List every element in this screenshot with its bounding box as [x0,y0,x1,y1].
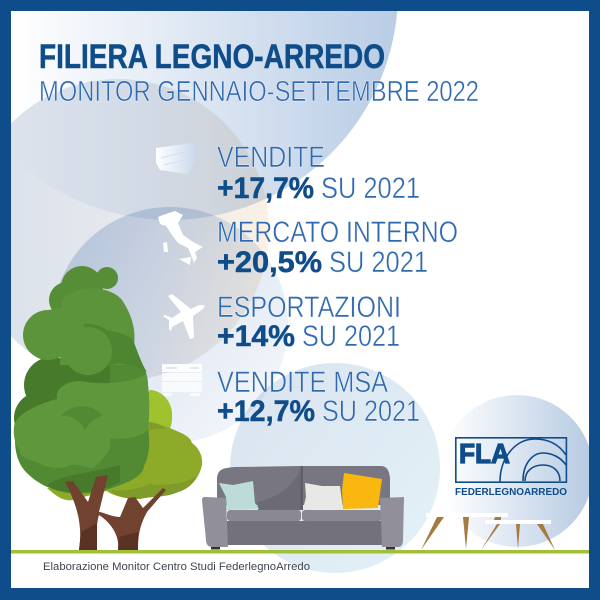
footer credit: Elaborazione Monitor Centro Studi FederlegnoArredo [43,561,310,573]
icon: banknotes [156,143,197,174]
icon: airplane [163,294,205,339]
cushion: teal [219,481,259,510]
icon: italy map [158,211,203,265]
logo: FLA: FLA [459,438,510,469]
stat: vendite msa: SU 2021 [322,395,420,428]
stat: mercato interno [217,216,458,279]
stat: mercato interno: +20,5% [217,246,322,279]
stat: esportazioni [217,291,401,353]
icon: furniture drawers [162,364,202,396]
stat: vendite [217,141,420,205]
illustration: light tree [47,390,202,500]
stat: vendite: +17,7% [217,172,314,205]
illustration: coffee tables [421,513,555,550]
stat: esportazioni: +14% [217,320,295,353]
ground line [11,550,589,554]
stat: vendite msa: VENDITE MSA [217,366,388,399]
stat: vendite: SU 2021 [321,172,420,205]
cushion: yellow [342,473,382,509]
stat: vendite: VENDITE [217,141,325,174]
logo: FLA [455,438,567,498]
title: FILIERA LEGNO-ARREDO [39,38,385,76]
logo: FLA: FEDERLEGNOARREDO [455,486,567,498]
subtitle: MONITOR GENNAIO-SETTEMBRE 2022 [39,76,479,108]
stat: mercato interno: MERCATO INTERNO [217,216,458,249]
stat: vendite msa [217,366,420,428]
stat: mercato interno: SU 2021 [329,246,428,279]
cushion: white [303,483,343,509]
stat: esportazioni: ESPORTAZIONI [217,291,401,324]
stat: vendite msa: +12,7% [217,395,315,428]
illustration: sofa [202,466,404,550]
illustration: trunks [65,475,166,550]
illustration: large tree [14,266,149,494]
stat: esportazioni: SU 2021 [302,320,400,353]
